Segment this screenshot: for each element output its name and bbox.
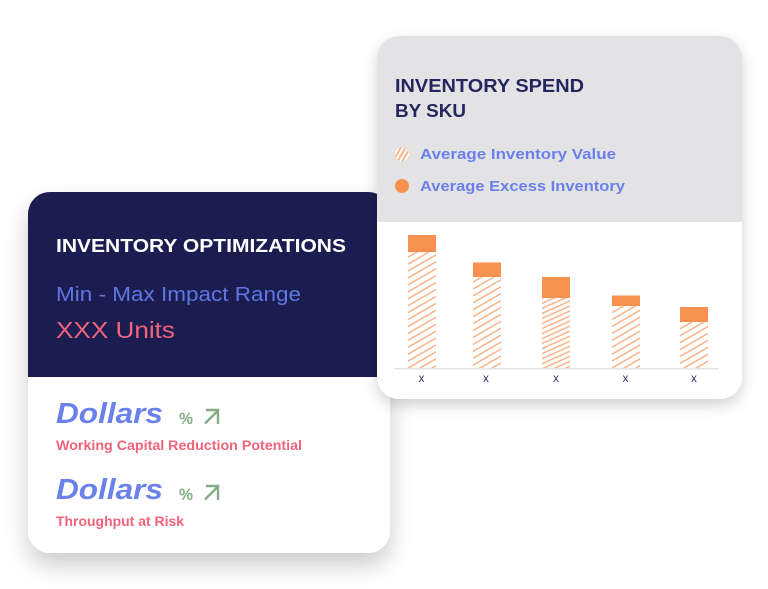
- heading: inventory optimizations: INVENTORY OPTIMIZATIONS: [56, 235, 346, 256]
- legend icon: solid: [395, 179, 409, 193]
- bar chart: x: [553, 373, 559, 385]
- bar chart: x: [483, 373, 489, 385]
- heading: by sku: BY SKU: [395, 100, 466, 121]
- icon: up arrow throughput: [205, 486, 218, 500]
- legend icon: hatched: [395, 148, 409, 162]
- legend: average excess inventory: Average Excess Inventory: [420, 178, 626, 195]
- panel header: gray: [377, 36, 742, 222]
- percent: throughput: %: [179, 485, 193, 504]
- text: impact range: Min - Max Impact Range: [56, 284, 301, 306]
- panel header: navy: [28, 192, 390, 377]
- heading: inventory spend: INVENTORY SPEND: [395, 75, 584, 96]
- bar chart: x: [419, 373, 425, 385]
- label: working capital: Working Capital Reduction Potential: [56, 438, 302, 453]
- panel: inventory optimizations: [28, 192, 390, 553]
- panel: inventory spend by sku: [377, 36, 742, 399]
- metric: working capital dollars: Dollars: [56, 398, 163, 430]
- label: throughput: Throughput at Risk: [56, 514, 184, 529]
- metric: throughput dollars: Dollars: [56, 474, 163, 506]
- bar chart: x: [623, 373, 629, 385]
- bar chart: [395, 235, 719, 385]
- icon: up arrow working capital: [205, 410, 218, 424]
- legend: average inventory value: Average Inventory Value: [420, 146, 616, 163]
- text: units: XXX Units: [56, 317, 175, 343]
- percent: working capital: %: [179, 409, 193, 428]
- bar chart: x: [691, 373, 697, 385]
